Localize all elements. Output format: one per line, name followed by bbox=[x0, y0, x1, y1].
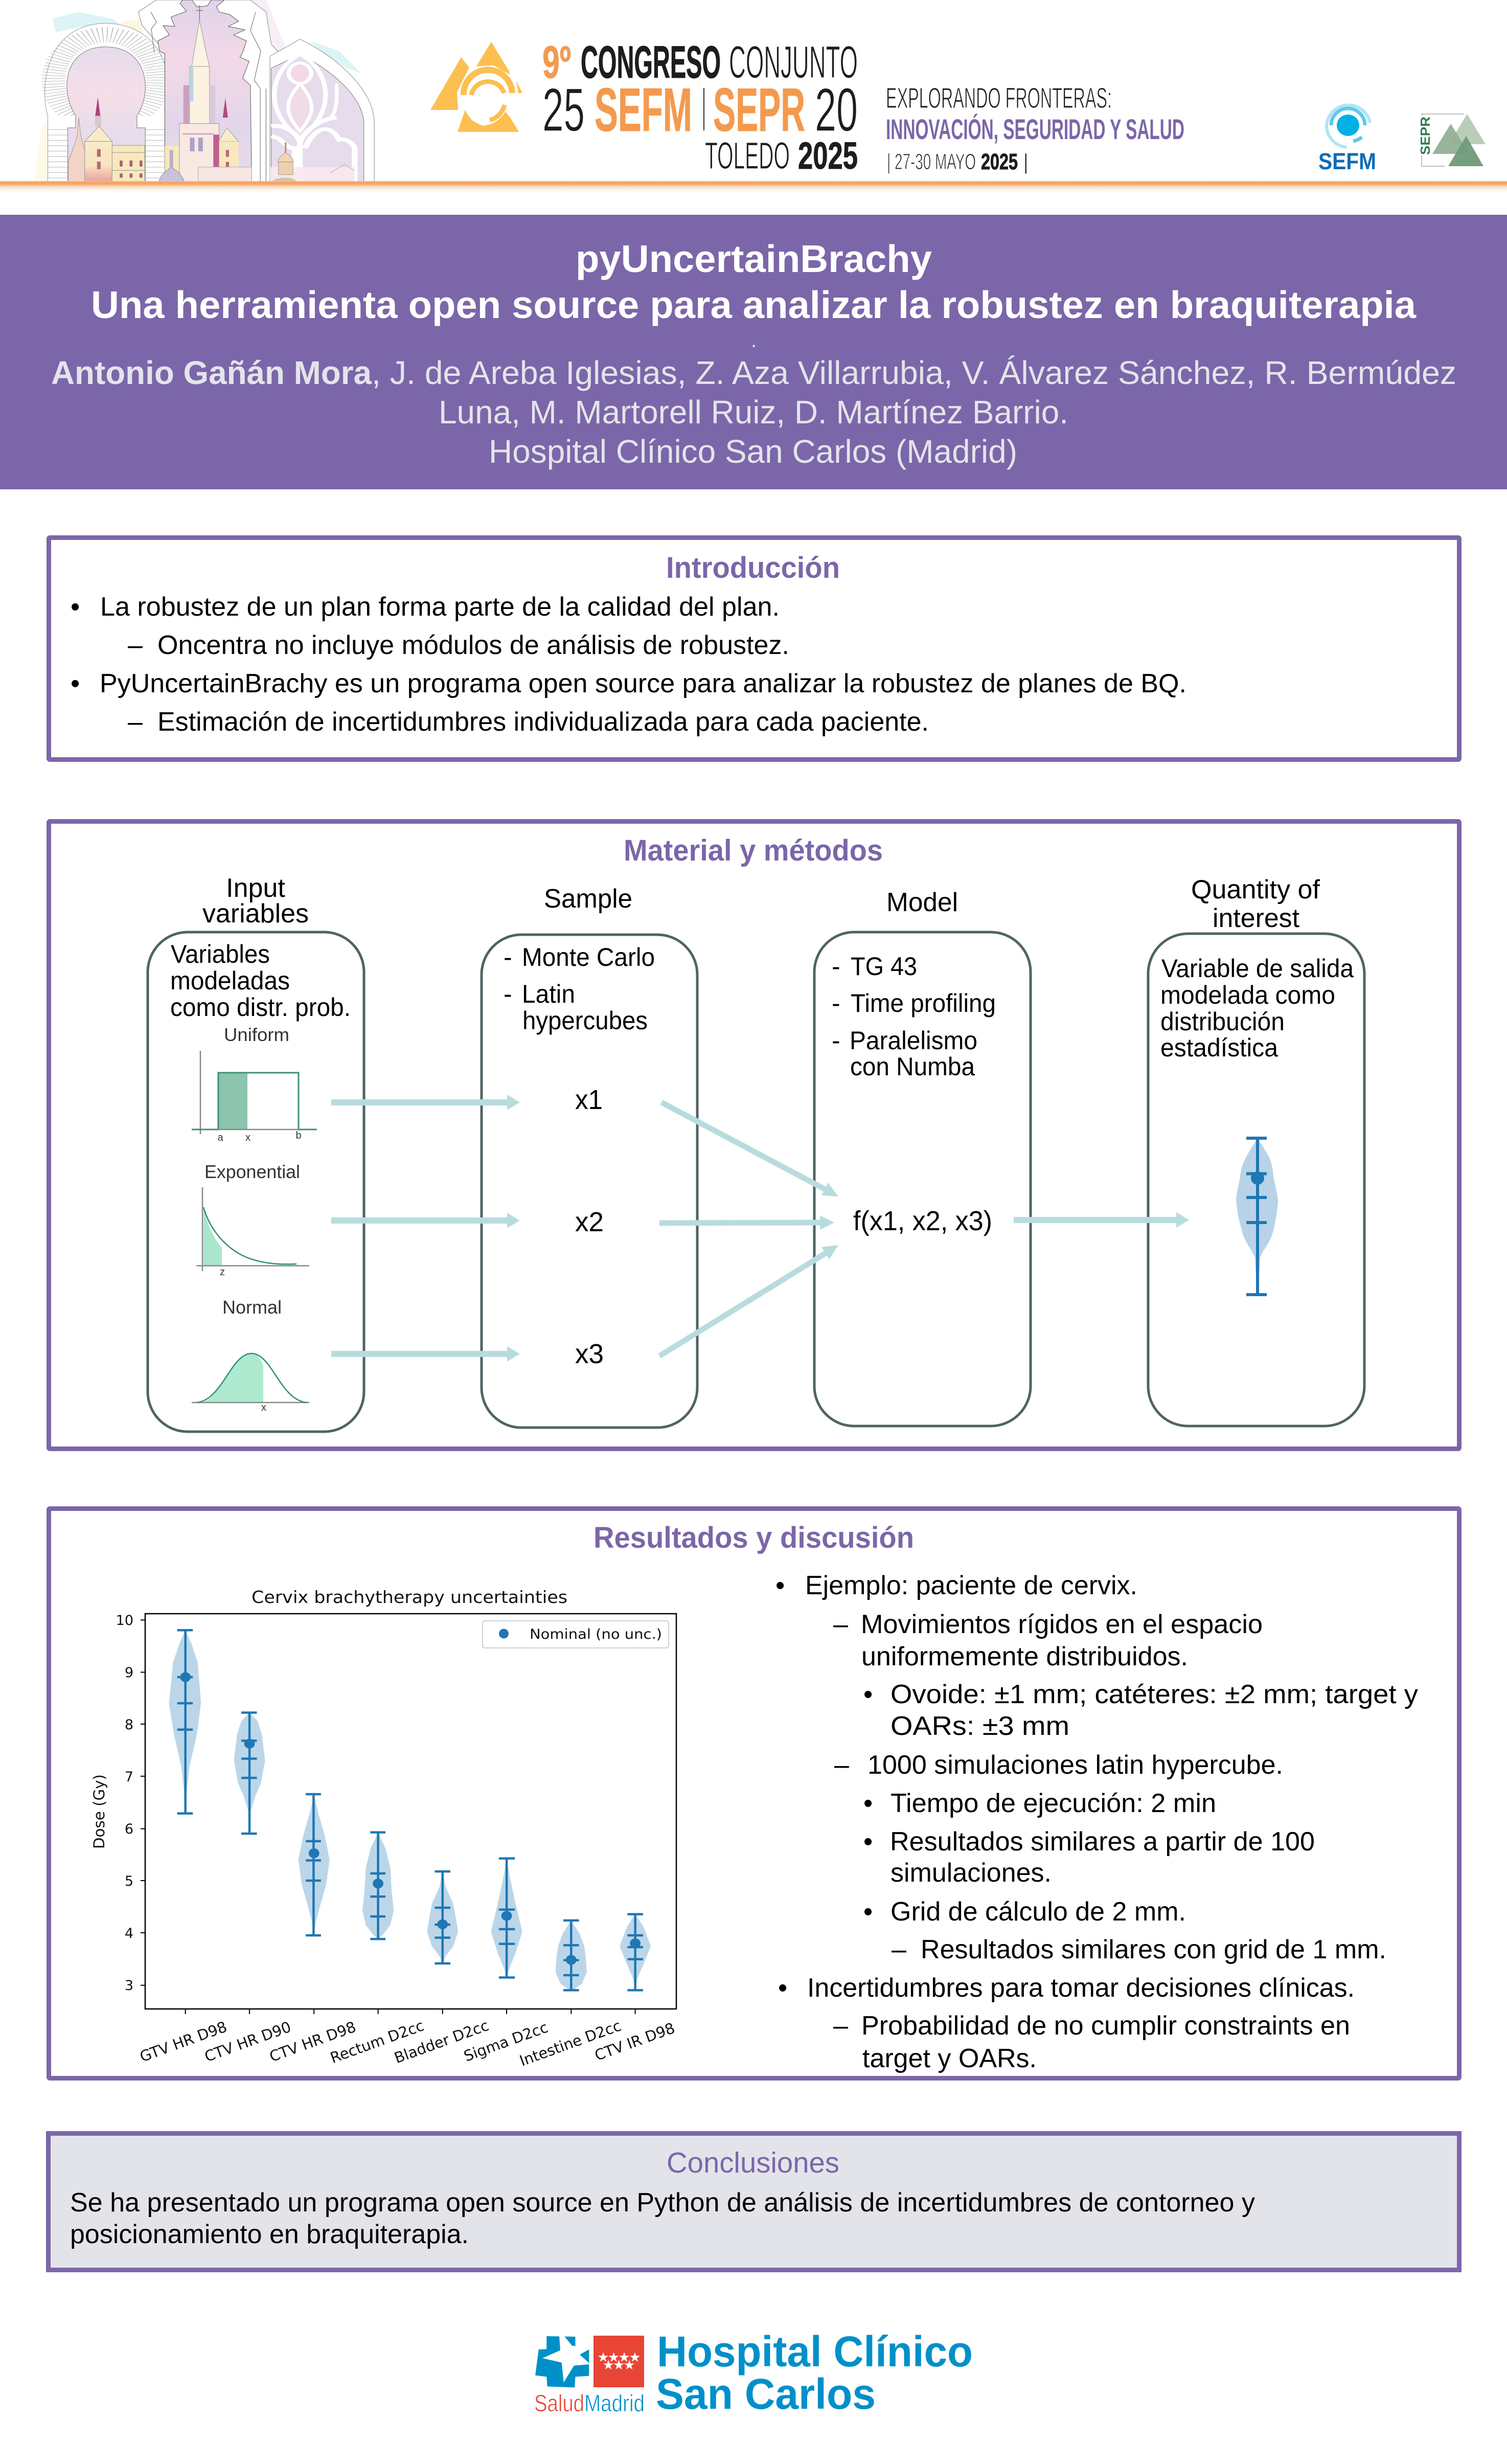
x axis: CTV HR D98 bbox=[267, 2018, 358, 2065]
authors and affiliation: Hospital Clínico San Carlos (Madrid) bbox=[489, 433, 1017, 470]
arrow: uniform to x1 bbox=[331, 1095, 520, 1110]
x axis: CTV HR D90 bbox=[202, 2018, 293, 2065]
icon: SEPR logo: SEPR bbox=[1418, 117, 1433, 155]
icon: SEFM logo: SEFM bbox=[1318, 148, 1376, 174]
bullet list bbox=[71, 592, 1186, 737]
bullet list: La robustez de un plan forma parte de la calidad del plan. bbox=[100, 592, 780, 622]
results text list: – bbox=[834, 1750, 849, 1780]
bullet list: Estimación de incertidumbres individualizada para cada paciente. bbox=[157, 707, 929, 737]
illustration: Toledo arches and skyline bbox=[34, 0, 374, 182]
panel: resultados y discusión bbox=[49, 1508, 1459, 2078]
y axis: 6 bbox=[125, 1821, 133, 1837]
authors and affiliation: Antonio Gañán Mora bbox=[51, 354, 372, 391]
hospital name: San Carlos bbox=[656, 2370, 876, 2418]
column: model bbox=[814, 888, 1031, 1426]
icon: Madrid flag: ★ bbox=[597, 2350, 609, 2365]
column: model: f(x1, x2, x3) bbox=[853, 1206, 992, 1236]
conclusion text bbox=[70, 2188, 1255, 2249]
icon: Madrid flag: ★ bbox=[608, 2350, 620, 2365]
hospital name: Hospital Clínico bbox=[657, 2327, 973, 2376]
arrow: model to output bbox=[1014, 1212, 1189, 1228]
authors and affiliation: Luna, M. Martorell Ruiz, D. Martínez Barrio. bbox=[439, 394, 1068, 431]
bullet list: PyUncertainBrachy es un programa open source para analizar la robustez de planes de BQ. bbox=[100, 669, 1186, 698]
icon: Madrid flag: ★ bbox=[613, 2358, 625, 2373]
results text list: – bbox=[892, 1935, 906, 1964]
legend bbox=[483, 1621, 669, 1648]
column: quantity of interest: distribución bbox=[1160, 1007, 1285, 1036]
column: sample: x2 bbox=[575, 1207, 604, 1237]
hospital logo bbox=[534, 2327, 973, 2418]
y axis: 3 bbox=[125, 1978, 133, 1994]
conclusion text: posicionamiento en braquiterapia. bbox=[70, 2220, 469, 2249]
chart: uniform distribution bbox=[192, 1024, 317, 1143]
results text list: simulaciones. bbox=[890, 1858, 1052, 1888]
column: model: Model bbox=[886, 888, 958, 917]
panel: conclusiones bbox=[48, 2133, 1459, 2270]
y axis: 7 bbox=[125, 1769, 133, 1785]
plot frame bbox=[145, 1614, 676, 2009]
title: pyUncertainBrachy bbox=[576, 237, 932, 280]
y axis: 9 bbox=[125, 1665, 133, 1681]
chart: uniform distribution: b bbox=[295, 1130, 302, 1141]
chart title: Cervix brachytherapy uncertainties bbox=[252, 1587, 567, 1607]
y axis: 5 bbox=[125, 1873, 133, 1889]
icon: Madrid flag: ★ bbox=[623, 2358, 635, 2373]
y axis: 10 bbox=[116, 1613, 133, 1629]
results text list: Tiempo de ejecución: 2 min bbox=[890, 1789, 1216, 1818]
x axis: Sigma D2cc bbox=[462, 2019, 551, 2065]
bullet list: – bbox=[128, 707, 143, 737]
column: quantity of interest: estadística bbox=[1160, 1033, 1278, 1062]
chart: normal distribution: x bbox=[261, 1402, 266, 1413]
congress motto text bbox=[886, 82, 1184, 174]
results text list: Ejemplo: paciente de cervix. bbox=[805, 1571, 1137, 1600]
icon: congress triangle logo bbox=[430, 42, 522, 132]
hospital name bbox=[656, 2327, 973, 2418]
results text list: OARs: ±3 mm bbox=[890, 1711, 1069, 1741]
results text list: • bbox=[863, 1827, 873, 1857]
column: model: Time profiling bbox=[851, 989, 996, 1018]
SaludMadrid wordmark bbox=[534, 2390, 645, 2416]
column: sample: hypercubes bbox=[522, 1006, 648, 1035]
y axis: Dose (Gy) bbox=[90, 1774, 108, 1849]
column: input variables: Variables bbox=[171, 940, 270, 968]
column: model: con Numba bbox=[850, 1052, 975, 1081]
column: sample: x1 bbox=[575, 1084, 603, 1115]
violin chart bbox=[90, 1587, 677, 2070]
congress title text: 25 bbox=[542, 76, 585, 144]
chart: exponential distribution: Exponential bbox=[204, 1161, 300, 1182]
results text list: target y OARs. bbox=[862, 2044, 1037, 2073]
results text list: Probabilidad de no cumplir constraints en bbox=[861, 2011, 1350, 2041]
authors and affiliation bbox=[51, 329, 1456, 470]
arrow: x3 to model bbox=[659, 1245, 838, 1356]
results text list: Movimientos rígidos en el espacio bbox=[861, 1610, 1263, 1639]
chart: uniform distribution: a bbox=[217, 1132, 223, 1143]
column: model: - bbox=[832, 952, 840, 981]
column: input variables: variables bbox=[202, 899, 309, 929]
column: sample: Sample bbox=[544, 884, 632, 914]
column: model: Paralelismo bbox=[850, 1026, 977, 1055]
column: model: TG 43 bbox=[851, 952, 917, 981]
congress motto text: | 27-30 MAYO bbox=[887, 149, 976, 174]
column: model: - bbox=[832, 989, 840, 1018]
arrow: normal to x3 bbox=[331, 1346, 520, 1362]
icon: Madrid flag bbox=[593, 2336, 644, 2387]
chart: uniform distribution: Uniform bbox=[224, 1024, 289, 1045]
chart: normal distribution: Normal bbox=[222, 1297, 282, 1318]
congress motto text: 2025 bbox=[981, 149, 1018, 174]
y axis: 4 bbox=[125, 1926, 133, 1941]
arrow: x1 to model bbox=[661, 1102, 838, 1196]
legend: Nominal (no unc.) bbox=[530, 1626, 662, 1642]
results text list: 1000 simulaciones latin hypercube. bbox=[867, 1750, 1283, 1780]
column: quantity of interest: Quantity of bbox=[1191, 875, 1320, 905]
x axis bbox=[138, 2009, 677, 2070]
column: sample: Monte Carlo bbox=[522, 943, 655, 971]
heading: Conclusiones bbox=[667, 2146, 839, 2179]
column: input variables: como distr. prob. bbox=[170, 993, 351, 1022]
results text list: Resultados similares con grid de 1 mm. bbox=[921, 1935, 1386, 1964]
column: model: - bbox=[832, 1026, 840, 1055]
bullet list: – bbox=[128, 630, 143, 660]
results text list: • bbox=[863, 1789, 873, 1818]
arrow: exponential to x2 bbox=[331, 1213, 520, 1228]
bullet list: • bbox=[71, 669, 80, 698]
congress title text: 2025 bbox=[798, 134, 858, 177]
authors and affiliation: , J. de Areba Iglesias, Z. Aza Villarrubia, V. Álvarez Sánchez, R. Bermúdez bbox=[372, 354, 1456, 391]
congress title text: TOLEDO bbox=[705, 134, 790, 177]
heading: Introducción bbox=[666, 551, 840, 584]
SaludMadrid wordmark: Salud bbox=[534, 2390, 584, 2416]
congress title text: 20 bbox=[815, 76, 858, 144]
column: quantity of interest: Variable de salida bbox=[1161, 954, 1354, 983]
violins bbox=[169, 1630, 651, 1990]
orange rule bbox=[0, 181, 1507, 191]
y axis bbox=[90, 1613, 145, 1994]
congress title text: 9º bbox=[542, 36, 571, 87]
title band bbox=[0, 215, 1507, 489]
results text list: • bbox=[778, 1973, 787, 2003]
results text list bbox=[775, 1571, 1418, 2073]
title: Una herramienta open source para analizar la robustez en braquiterapia bbox=[91, 283, 1417, 326]
x axis: Bladder D2cc bbox=[392, 2017, 491, 2067]
x axis: Intestine D2cc bbox=[517, 2017, 624, 2070]
column: input variables bbox=[148, 873, 364, 1432]
bullet list: Oncentra no incluye módulos de análisis de robustez. bbox=[157, 630, 789, 660]
chart: exponential distribution: z bbox=[220, 1267, 225, 1278]
header banner bbox=[0, 0, 1507, 191]
chart: exponential distribution bbox=[196, 1161, 309, 1278]
results text list: – bbox=[833, 1610, 848, 1639]
panel: material y métodos bbox=[49, 821, 1459, 1449]
results text list: Ovoide: ±1 mm; catéteres: ±2 mm; target y bbox=[890, 1680, 1418, 1709]
congress title text: CONGRESO bbox=[581, 36, 721, 87]
results text list: • bbox=[863, 1680, 873, 1709]
results text list: • bbox=[863, 1897, 873, 1927]
congress motto text: | bbox=[1023, 149, 1029, 174]
results text list: uniformemente distribuidos. bbox=[861, 1642, 1188, 1671]
column: sample: - bbox=[504, 980, 512, 1008]
icon: Madrid flag: ★ bbox=[602, 2358, 614, 2373]
chart: uniform distribution: x bbox=[245, 1132, 250, 1143]
x axis: CTV IR D98 bbox=[592, 2019, 677, 2064]
congress title text bbox=[542, 36, 858, 177]
column: sample: Latin bbox=[522, 980, 575, 1008]
column: sample: x3 bbox=[575, 1339, 604, 1369]
icon: SEPR logo bbox=[1418, 114, 1486, 166]
icon: SaludMadrid cross bbox=[535, 2336, 590, 2387]
column: quantity of interest: interest bbox=[1213, 903, 1300, 933]
x axis: Rectum D2cc bbox=[328, 2017, 426, 2067]
congress title text: SEPR bbox=[713, 76, 805, 144]
x axis: GTV HR D98 bbox=[138, 2018, 229, 2066]
title bbox=[91, 237, 1417, 326]
SaludMadrid wordmark: Madrid bbox=[584, 2390, 645, 2416]
column: sample bbox=[482, 884, 697, 1428]
authors and affiliation: . bbox=[751, 329, 757, 352]
results text list: Incertidumbres para tomar decisiones clínicas. bbox=[807, 1973, 1355, 2003]
panel: introducción bbox=[49, 538, 1459, 760]
conclusion text: Se ha presentado un programa open source en Python de análisis de incertidumbres de contorneo y bbox=[70, 2188, 1255, 2218]
icon: single violin plot bbox=[1236, 1138, 1278, 1295]
column: input variables: Input bbox=[226, 873, 285, 903]
results text list: • bbox=[775, 1571, 785, 1600]
congress motto text: INNOVACIÓN, SEGURIDAD Y SALUD bbox=[886, 113, 1184, 145]
column: input variables: modeladas bbox=[170, 966, 290, 995]
results text list: Grid de cálculo de 2 mm. bbox=[890, 1897, 1186, 1927]
icon: Madrid flag: ★ bbox=[618, 2350, 630, 2365]
heading: Material y métodos bbox=[624, 834, 883, 867]
heading: Resultados y discusión bbox=[593, 1521, 914, 1554]
bullet list: • bbox=[71, 592, 80, 622]
results text list: Resultados similares a partir de 100 bbox=[890, 1827, 1315, 1857]
icon: SEFM logo bbox=[1318, 105, 1376, 174]
column: quantity of interest: modelada como bbox=[1160, 981, 1335, 1009]
congress title text: SEFM bbox=[595, 76, 692, 144]
congress motto text: EXPLORANDO FRONTERAS: bbox=[886, 82, 1112, 115]
chart: normal distribution bbox=[192, 1297, 309, 1413]
icon: Madrid flag: ★ bbox=[629, 2350, 641, 2365]
results text list: – bbox=[833, 2011, 848, 2041]
y axis: 8 bbox=[125, 1717, 133, 1733]
congress title text: CONJUNTO bbox=[729, 36, 858, 87]
column: sample: - bbox=[504, 943, 512, 971]
arrow: x2 to model bbox=[659, 1215, 834, 1230]
column: quantity of interest bbox=[1148, 875, 1364, 1426]
